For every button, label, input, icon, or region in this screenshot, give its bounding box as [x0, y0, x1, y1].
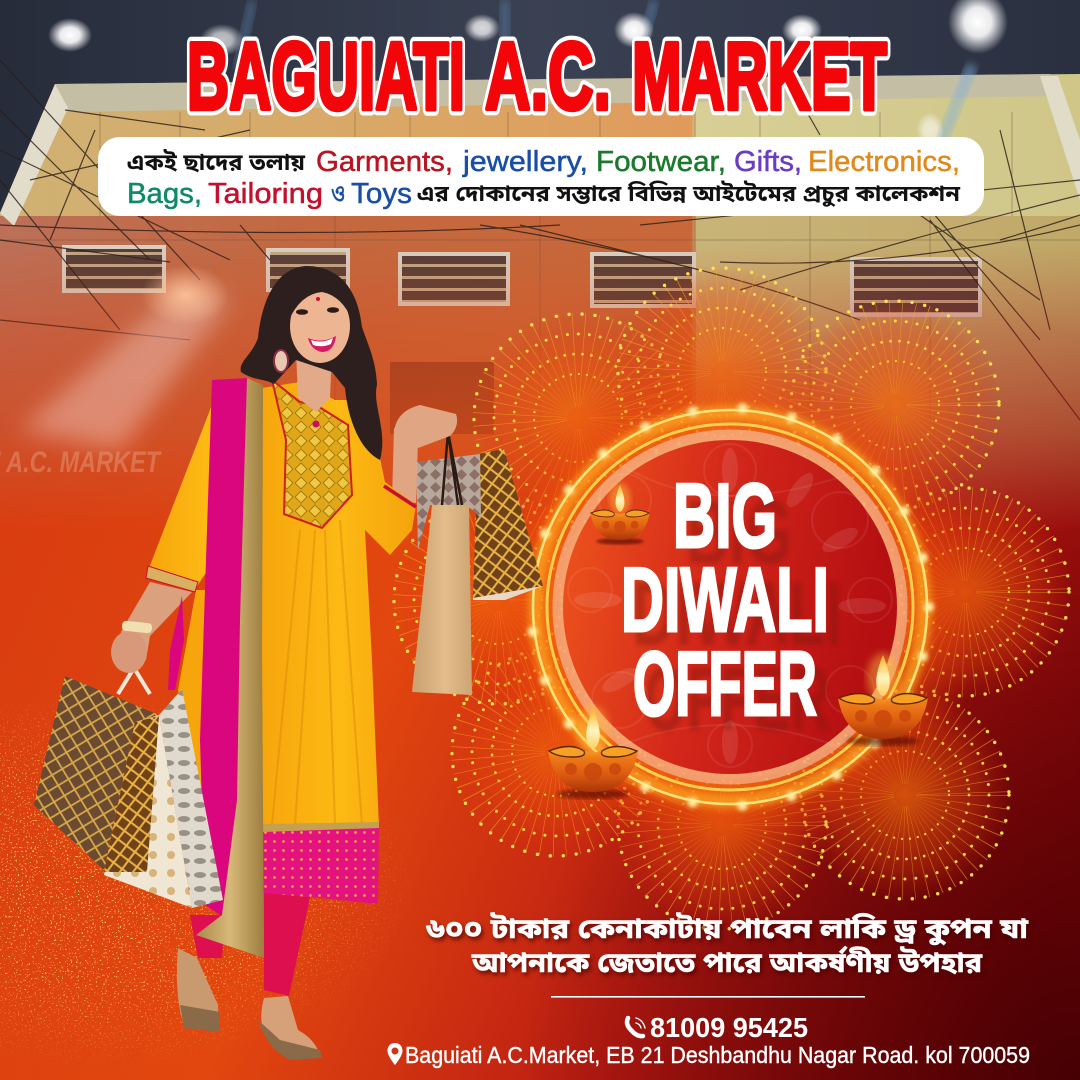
glow — [475, 352, 985, 862]
panel: store categories: Gifts, — [734, 146, 802, 178]
ventilation louvres — [64, 247, 980, 434]
panel: store categories: Electronics, — [808, 146, 960, 178]
panel: store categories: Toys — [351, 178, 412, 210]
panel: store categories: Footwear, — [596, 146, 726, 178]
icon: left diya — [548, 706, 638, 799]
divider — [551, 996, 865, 998]
heading: BIG DIWALI OFFER: DIWALI — [632, 564, 842, 665]
panel: store categories: Garments, — [316, 146, 453, 178]
title red fill: A.C. — [485, 23, 611, 130]
building wall — [0, 74, 1080, 546]
title red fill: MARKET — [632, 23, 887, 130]
wrist bangle — [122, 620, 152, 634]
title outline: A.C. — [485, 23, 611, 130]
heading: BIG DIWALI OFFER: BIG — [686, 482, 792, 583]
face — [288, 280, 352, 363]
firework bursts — [392, 266, 1071, 931]
icon: phone — [627, 1018, 645, 1036]
panel: store categories — [98, 137, 984, 216]
woman with shopping bags — [34, 266, 543, 1060]
hair — [241, 266, 382, 460]
red floor and fade over building — [0, 257, 1080, 1080]
neck — [296, 350, 332, 412]
panel: store categories: ও — [331, 180, 345, 208]
title red fill: BAGUIATI — [187, 23, 465, 130]
contact phone — [627, 1012, 808, 1043]
offer badge — [475, 352, 985, 862]
dupatta back fold — [168, 596, 184, 690]
gold dust — [0, 696, 410, 1064]
right forearm and hand — [392, 405, 457, 503]
heading: BIG DIWALI OFFER — [621, 466, 842, 750]
icon: right diya — [838, 653, 928, 746]
offer text: ৬০০ টাকার কেনাকাটায় পাবেন লাকি ড্র কুপন যা — [426, 912, 1029, 946]
title outline: BAGUIATI — [187, 23, 465, 130]
panel: store categories: Tailoring — [208, 178, 323, 210]
phone number: 81009 95425 — [650, 1012, 808, 1043]
title — [187, 23, 887, 130]
panel: store categories: এর দোকানের সম্ভারে বিভিন্ন আইটেমের প্রচুর কালেকশন — [417, 181, 960, 208]
dupatta — [196, 378, 264, 958]
heading: BIG DIWALI OFFER: OFFER — [644, 649, 830, 750]
gold rings — [531, 408, 929, 806]
panel: store categories: একই ছাদের তলায় — [127, 148, 306, 175]
kurta sleeve: left — [146, 384, 262, 592]
hand: left — [111, 631, 147, 673]
embroidered yoke — [272, 380, 352, 528]
faded storefront sign: I A.C. MARKET — [0, 446, 162, 479]
panel: store categories: jewellery, — [462, 146, 588, 178]
kurta back panel — [178, 590, 215, 830]
stage lights — [48, 0, 1008, 197]
necklace — [312, 420, 320, 428]
contact address — [388, 1042, 1030, 1068]
shopping bags: right hand — [412, 432, 543, 695]
icon: map pin — [388, 1043, 402, 1065]
light beam — [20, 285, 230, 450]
sandals and feet — [177, 948, 322, 1060]
kurta body — [262, 382, 416, 836]
lens flare — [141, 265, 229, 325]
red disk — [563, 440, 897, 774]
shopping bags: left hand — [34, 668, 223, 908]
left arm — [113, 582, 192, 660]
heading: BIG DIWALI OFFER: BIG — [673, 466, 777, 567]
night sky — [0, 0, 1080, 320]
legs — [190, 893, 311, 996]
earrings — [274, 350, 288, 372]
icon: small diya — [590, 483, 650, 545]
overhead wires — [0, 60, 1080, 420]
heading: BIG DIWALI OFFER: OFFER — [633, 634, 817, 735]
heading: BIG DIWALI OFFER: DIWALI — [621, 550, 829, 651]
title outline: MARKET — [632, 23, 887, 130]
offer text — [426, 912, 1029, 978]
hem band — [262, 822, 379, 904]
title red fill — [187, 23, 887, 130]
offer text: আপনাকে জেতাতে পারে আকর্ষণীয় উপহার — [471, 945, 983, 978]
panel: store categories: Bags, — [127, 178, 202, 210]
translucent ring — [558, 435, 902, 779]
address text: Baguiati A.C.Market, EB 21 Deshbandhu Nagar Road. kol 700059 — [405, 1042, 1030, 1068]
title outline — [187, 23, 887, 130]
floral pattern — [568, 444, 892, 767]
